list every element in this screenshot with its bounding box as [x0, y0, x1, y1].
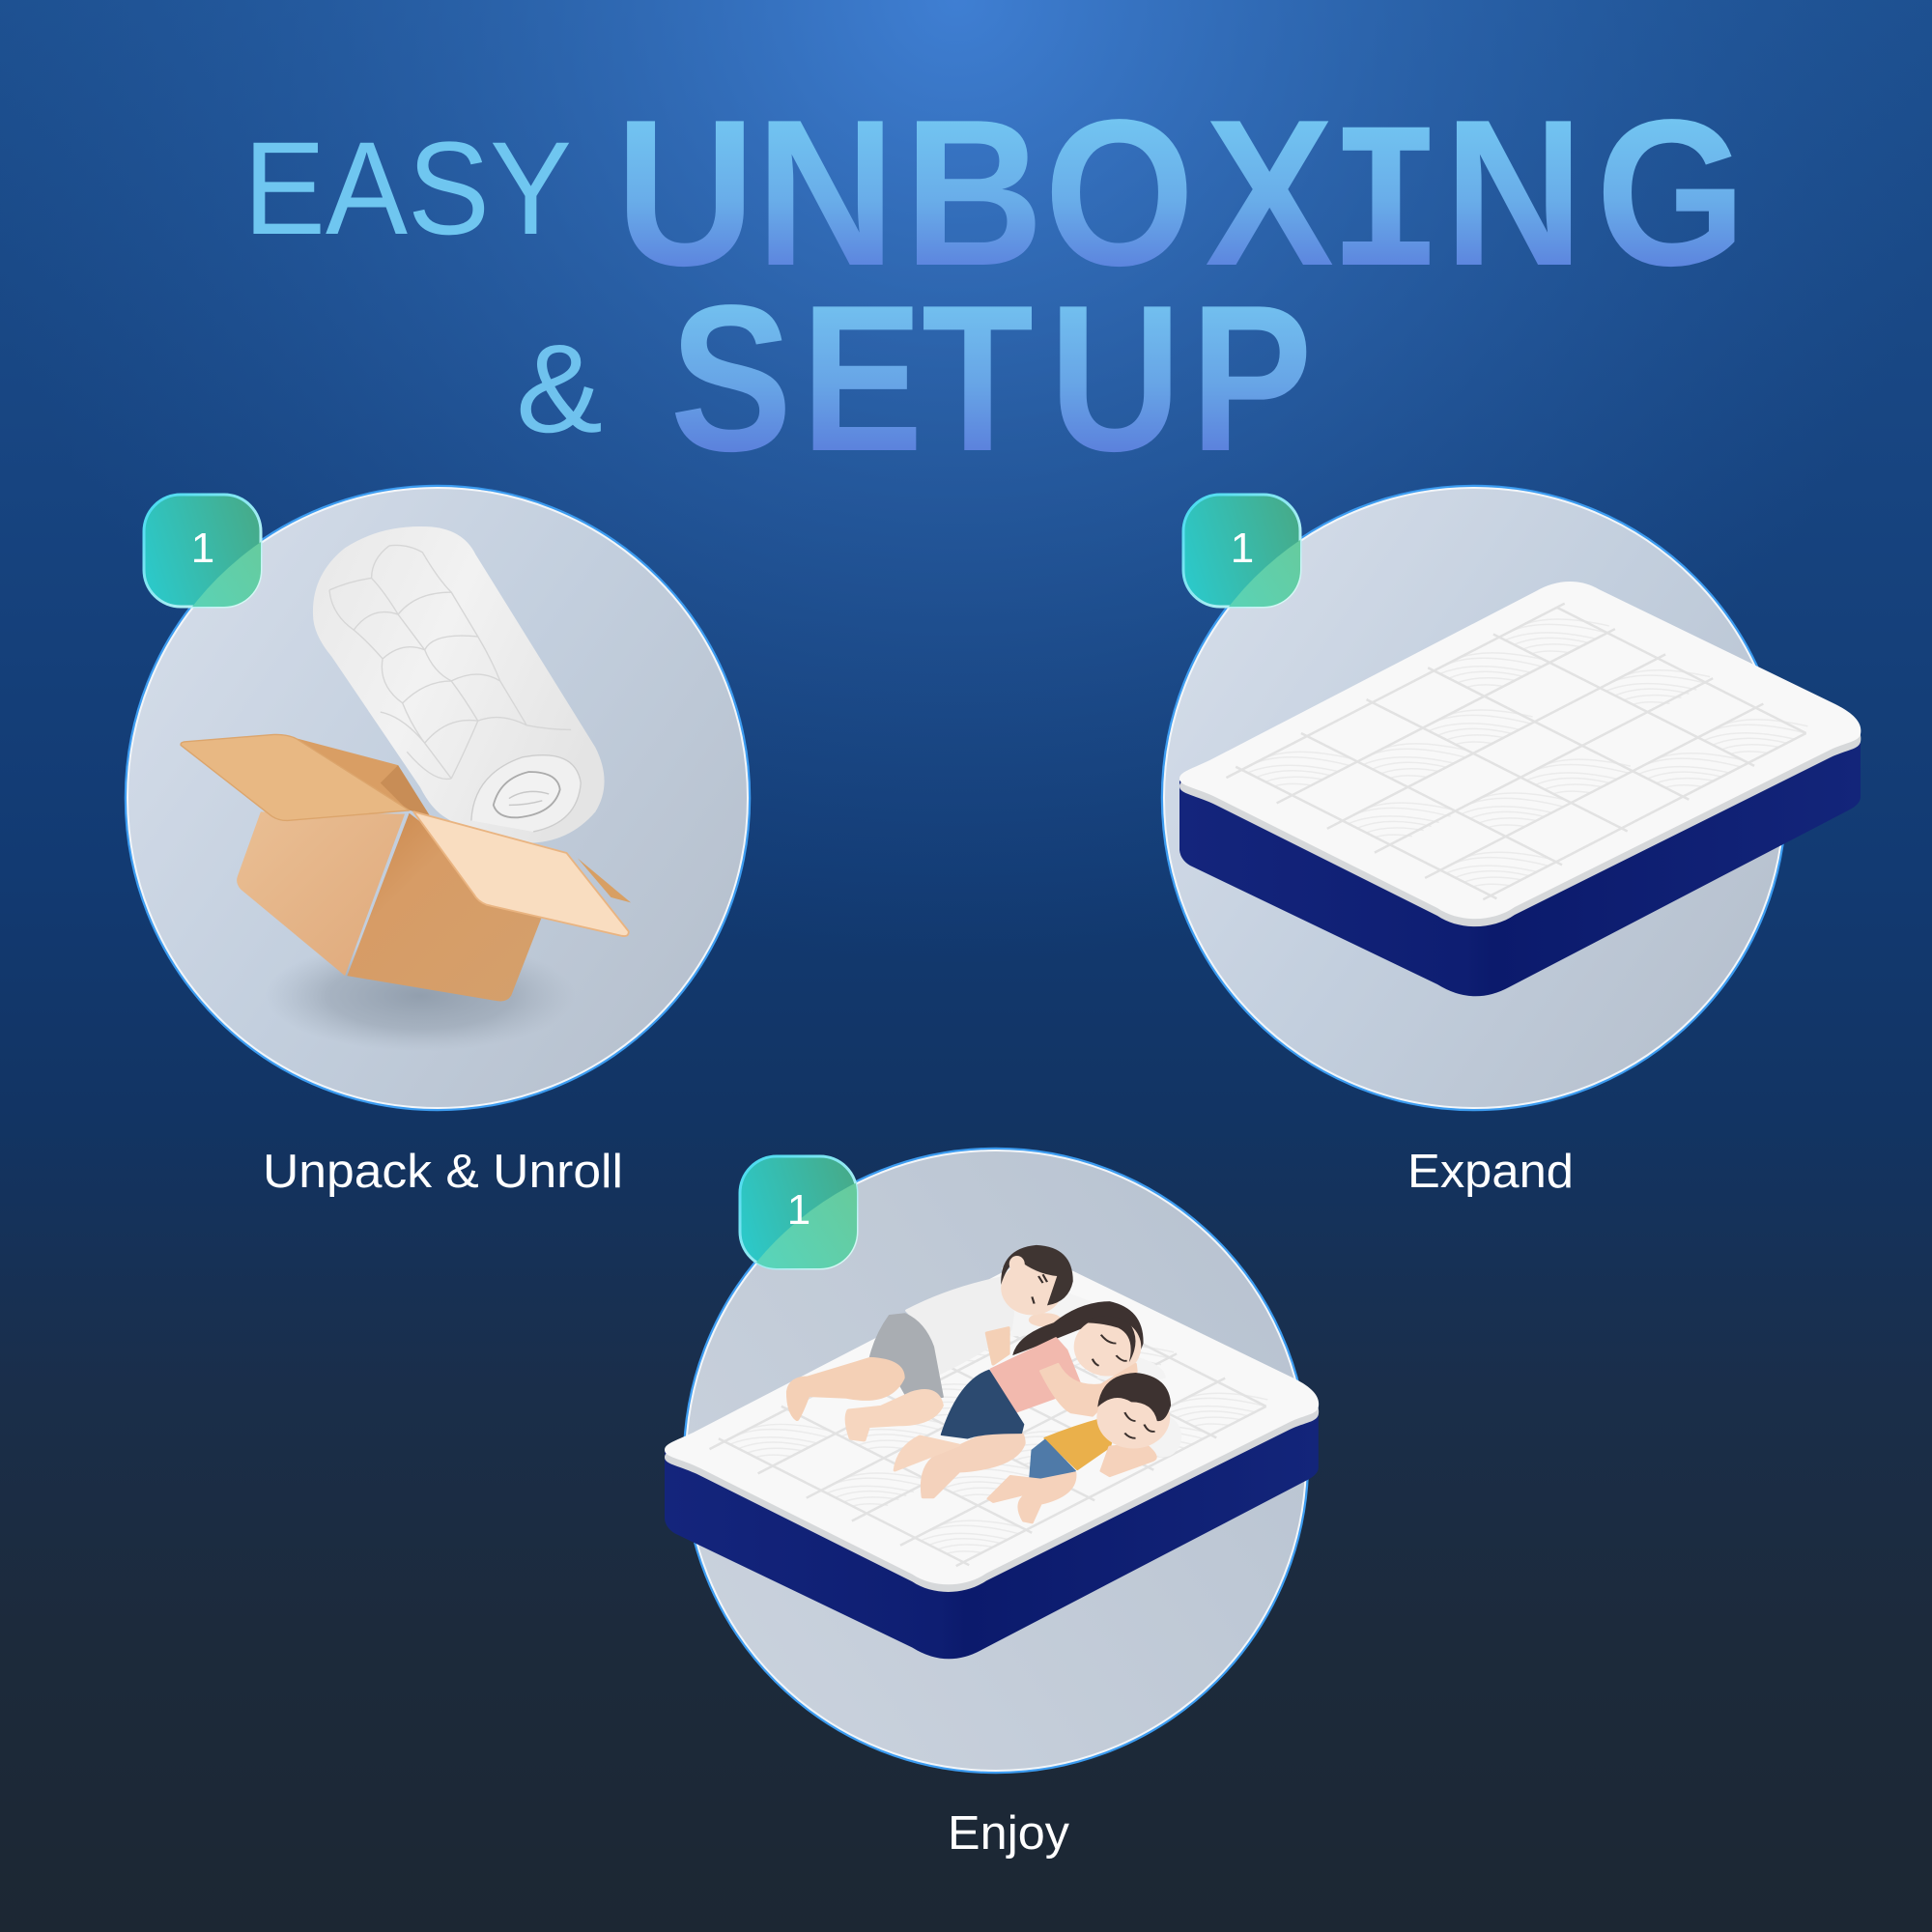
panel: step 1 unpack and unroll: [126, 486, 750, 1198]
circle backdrop: [684, 1149, 1308, 1773]
title word: UNBOXING: I: [1328, 91, 1444, 327]
title word: UNBOXING: G: [1596, 76, 1747, 310]
title word: EASY: EASY: [243, 115, 572, 263]
child: [988, 1373, 1181, 1522]
label: Expand: Expand: [1407, 1146, 1574, 1198]
title word: UNBOXING: B: [904, 76, 1044, 310]
title ampersand: &: [516, 318, 603, 459]
box left flap: [181, 734, 410, 820]
step number badge: [144, 495, 261, 607]
step number badge: [740, 1156, 857, 1268]
title word: UNBOXING: O: [1044, 76, 1195, 310]
step number badge: [1183, 495, 1300, 607]
title word: SETUP: T: [922, 263, 1034, 496]
title word: UNBOXING: N: [1444, 76, 1584, 310]
panel: step 3 enjoy: [665, 1149, 1319, 1860]
title word: SETUP: U: [1049, 263, 1181, 496]
circle backdrop: [1162, 486, 1786, 1110]
title word: UNBOXING: X: [1205, 76, 1334, 310]
label: Unpack & Unroll: Unpack & Unroll: [263, 1146, 623, 1198]
box right flap: [578, 859, 631, 902]
title word: UNBOXING: N: [755, 76, 895, 310]
step number badge: 1: [1231, 525, 1254, 572]
title: [243, 76, 1747, 496]
icon: sleeping family: [788, 1245, 1181, 1522]
icon: mattress under family: [665, 1261, 1319, 1659]
label: Enjoy: Enjoy: [948, 1807, 1070, 1860]
title word: SETUP: E: [801, 263, 923, 496]
title word: SETUP: S: [669, 263, 792, 496]
step number badge: 1: [787, 1186, 810, 1234]
icon: box with rolled mattress: [181, 526, 631, 1051]
title word: UNBOXING: U: [615, 76, 755, 310]
rolled mattress: [313, 526, 605, 843]
father: [788, 1245, 1093, 1440]
circle backdrop: [126, 486, 750, 1110]
mother: [895, 1301, 1166, 1496]
box left face: [237, 811, 405, 976]
icon: expanded mattress: [1179, 582, 1861, 996]
title word: SETUP: P: [1190, 263, 1313, 496]
panel: step 2 expand: [1162, 486, 1861, 1198]
step number badge: 1: [191, 525, 214, 572]
box right face: [347, 813, 542, 1002]
